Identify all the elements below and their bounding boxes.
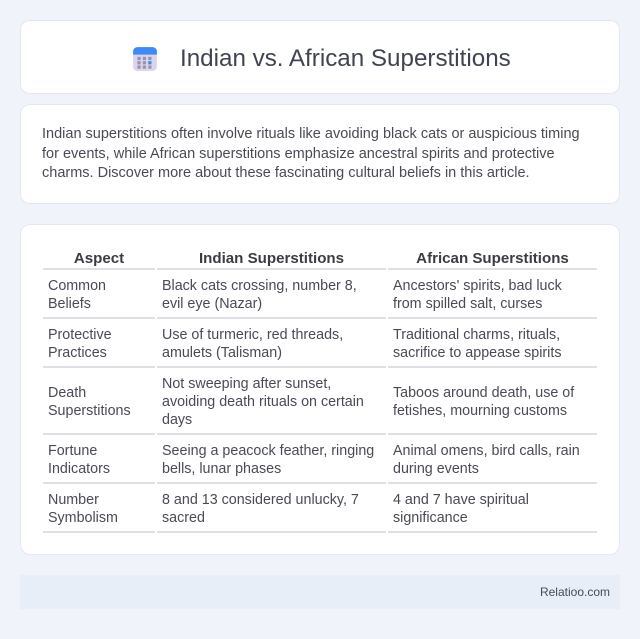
row label: common beliefs: Common <box>48 278 106 294</box>
icon: calendar <box>133 47 157 71</box>
cell: African common beliefs: from spilled salt, curses <box>393 296 542 312</box>
cell: Indian number symbolism: sacred <box>162 510 205 526</box>
panel: comparison table <box>20 224 620 555</box>
footer bar <box>20 575 620 609</box>
cell: Indian number symbolism: 8 and 13 considered unlucky, 7 <box>162 492 359 508</box>
cell: African number symbolism: significance <box>393 510 468 526</box>
cell: Indian protective practices: Use of turmeric, red threads, <box>162 327 343 343</box>
cell: African number symbolism: 4 and 7 have spiritual <box>393 492 529 508</box>
cell: African common beliefs: Ancestors' spirits, bad luck <box>393 278 562 294</box>
cell: African fortune indicators: Animal omens, bird calls, rain <box>393 443 580 459</box>
cell: African common beliefs <box>393 278 562 312</box>
cell: Indian death superstitions <box>162 376 364 428</box>
table header: Indian superstitions: Indian Superstitions <box>199 250 344 267</box>
panel: title card <box>20 20 620 94</box>
cell: African fortune indicators <box>393 443 580 477</box>
row label: death superstitions: Superstitions <box>48 403 131 419</box>
row label: common beliefs: Beliefs <box>48 296 91 312</box>
row label: common beliefs <box>48 278 106 312</box>
row label: number symbolism: Number <box>48 492 99 508</box>
cell: Indian common beliefs: evil eye (Nazar) <box>162 296 262 312</box>
intro text: charms. Discover more about these fascinating cultural beliefs in this article. <box>42 165 530 181</box>
row label: death superstitions <box>48 385 131 419</box>
cell: Indian death superstitions: avoiding death rituals on certain <box>162 394 364 410</box>
cell: African number symbolism <box>393 492 529 526</box>
cell: Indian common beliefs <box>162 278 357 312</box>
table header: aspect: Aspect <box>74 250 124 267</box>
cell: Indian death superstitions: days <box>162 412 192 428</box>
table header: African superstitions: African Superstitions <box>416 250 569 267</box>
cell: Indian death superstitions: Not sweeping after sunset, <box>162 376 331 392</box>
row label: protective practices <box>48 327 112 361</box>
panel: introduction <box>20 104 620 204</box>
cell: Indian protective practices <box>162 327 343 361</box>
footer credit: Relatioo.com <box>540 585 610 599</box>
intro text <box>42 126 580 181</box>
row label: protective practices: Protective <box>48 327 112 343</box>
cell: African protective practices: sacrifice to appease spirits <box>393 345 561 361</box>
cell: African death superstitions: fetishes, mourning customs <box>393 403 567 419</box>
row label: fortune indicators: Indicators <box>48 461 110 477</box>
cell: Indian number symbolism <box>162 492 359 526</box>
cell: Indian common beliefs: Black cats crossing, number 8, <box>162 278 357 294</box>
cell: Indian fortune indicators: bells, lunar phases <box>162 461 281 477</box>
row label: number symbolism <box>48 492 118 526</box>
cell: African protective practices: Traditional charms, rituals, <box>393 327 560 343</box>
title: Indian vs. African Superstitions <box>180 45 511 72</box>
cell: African fortune indicators: during events <box>393 461 479 477</box>
row label: protective practices: Practices <box>48 345 107 361</box>
cell: Indian fortune indicators <box>162 443 374 477</box>
cell: African death superstitions: Taboos around death, use of <box>393 385 574 401</box>
cell: Indian protective practices: amulets (Talisman) <box>162 345 282 361</box>
cell: African protective practices <box>393 327 561 361</box>
row label: death superstitions: Death <box>48 385 86 401</box>
row label: fortune indicators: Fortune <box>48 443 97 459</box>
intro text: Indian superstitions often involve rituals like avoiding black cats or auspicious timing <box>42 126 580 142</box>
intro text: for events, while African superstitions emphasize ancestral spirits and protective <box>42 146 555 162</box>
cell: Indian fortune indicators: Seeing a peacock feather, ringing <box>162 443 374 459</box>
row label: fortune indicators <box>48 443 110 477</box>
row label: number symbolism: Symbolism <box>48 510 118 526</box>
cell: African death superstitions <box>393 385 574 419</box>
